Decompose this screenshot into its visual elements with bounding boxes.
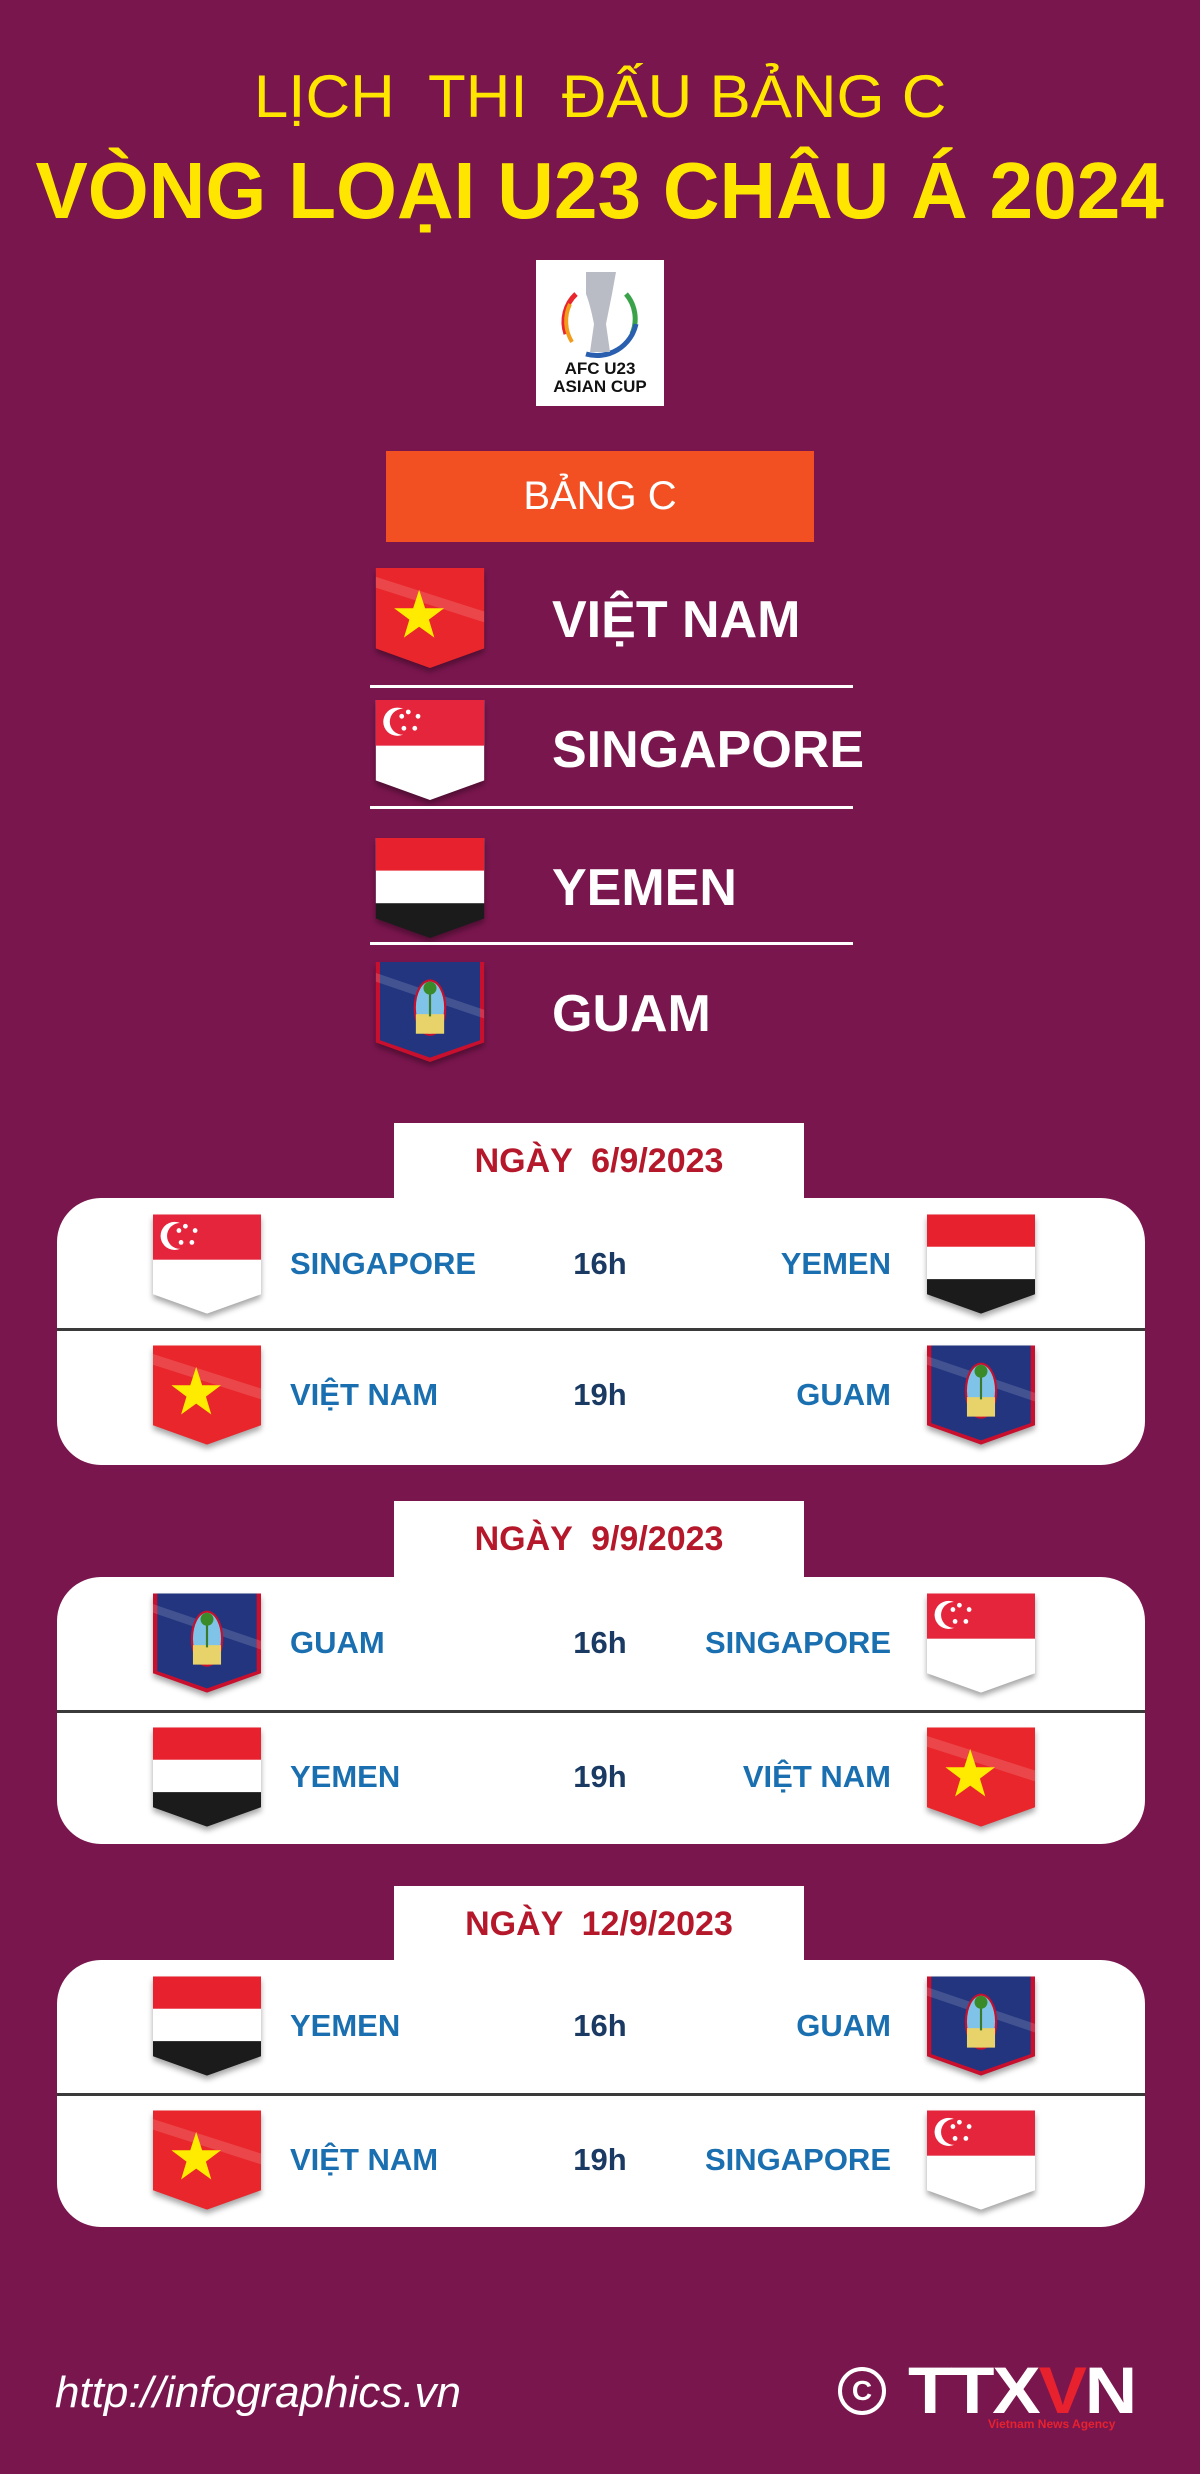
match: Yemen vs Guam	[150, 1976, 1038, 2082]
match: Viet Nam vs Guam: VIỆT NAM	[290, 1377, 438, 1412]
match: Singapore vs Yemen: YEMEN	[781, 1246, 891, 1281]
match card 3	[57, 1960, 1145, 2227]
title line 2: VÒNG LOẠI U23 CHÂU Á 2024	[36, 146, 1164, 235]
match: Viet Nam vs Singapore: VIỆT NAM	[290, 2142, 438, 2177]
match card 1	[57, 1198, 1145, 1465]
team: Guam	[374, 962, 711, 1068]
logo: AFC U23 Asian Cup: ASIAN CUP	[553, 377, 647, 396]
group label box: BẢNG C	[523, 474, 677, 518]
date tab 3: NGÀY 12/9/2023	[465, 1905, 733, 1943]
team: Singapore	[373, 700, 864, 806]
team: Yemen	[373, 838, 737, 942]
match: Guam vs Singapore: 16h	[573, 1625, 627, 1660]
match: Viet Nam vs Singapore: SINGAPORE	[705, 2142, 891, 2177]
match: Yemen vs Guam: YEMEN	[290, 2008, 400, 2043]
group label box	[386, 451, 814, 542]
match: Singapore vs Yemen: SINGAPORE	[290, 1246, 476, 1281]
date tab 1	[394, 1123, 804, 1199]
match card 2	[57, 1577, 1145, 1844]
match: Singapore vs Yemen	[150, 1214, 1038, 1320]
match: Viet Nam vs Guam: GUAM	[796, 1377, 891, 1412]
team: Singapore: SINGAPORE	[552, 721, 864, 779]
match: Yemen vs Viet Nam: YEMEN	[290, 1759, 400, 1794]
date tab 1: NGÀY 6/9/2023	[475, 1142, 723, 1180]
date tab 3	[394, 1886, 804, 1962]
match: Guam vs Singapore: SINGAPORE	[705, 1625, 891, 1660]
match: Yemen vs Viet Nam	[150, 1727, 1038, 1834]
match: Viet Nam vs Singapore: 19h	[573, 2142, 627, 2177]
match: Yemen vs Guam: 16h	[573, 2008, 627, 2043]
logo: AFC U23 Asian Cup: AFC U23	[565, 359, 635, 378]
match: Guam vs Singapore	[150, 1593, 1038, 1700]
title line 1: LỊCH THI ĐẤU BẢNG C	[254, 63, 946, 130]
match: Guam vs Singapore: GUAM	[290, 1625, 385, 1660]
footer logo: TTXVN: Vietnam News Agency	[988, 2417, 1115, 2431]
footer logo: TTXVN: TTXVN	[908, 2353, 1135, 2427]
match: Yemen vs Viet Nam: 19h	[573, 1759, 627, 1794]
date tab 2	[394, 1501, 804, 1577]
match: Viet Nam vs Singapore	[150, 2110, 1038, 2216]
match: Viet Nam vs Guam	[150, 1345, 1038, 1452]
match: Singapore vs Yemen: 16h	[573, 1246, 627, 1281]
match: Yemen vs Viet Nam: VIỆT NAM	[743, 1759, 891, 1794]
date tab 2: NGÀY 9/9/2023	[475, 1520, 723, 1558]
team: Guam: GUAM	[552, 985, 711, 1043]
footer logo: TTXVN: C	[852, 2375, 872, 2406]
match: Yemen vs Guam: GUAM	[796, 2008, 891, 2043]
team: Viet Nam	[374, 568, 800, 674]
team: Viet Nam: VIỆT NAM	[552, 591, 800, 649]
match: Viet Nam vs Guam: 19h	[573, 1377, 627, 1412]
team: Yemen: YEMEN	[552, 859, 737, 917]
logo: AFC U23 Asian Cup	[536, 260, 664, 406]
footer url: http://infographics.vn	[55, 2368, 461, 2417]
